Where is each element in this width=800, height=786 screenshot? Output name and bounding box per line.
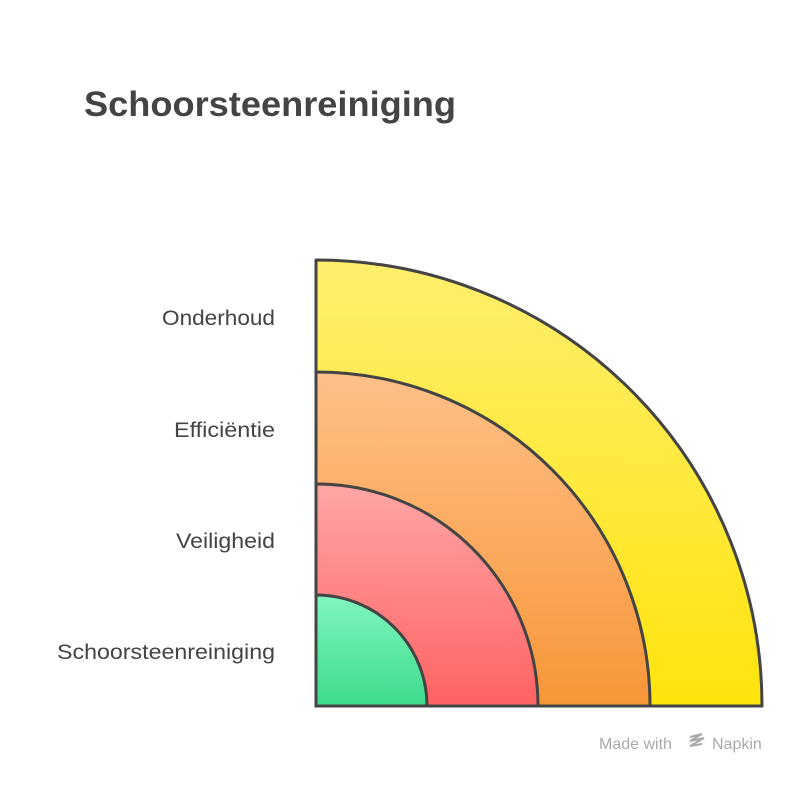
band: Veiligheid: [316, 484, 538, 706]
label: Schoorsteenreiniging: Schoorsteenreiniging: [57, 641, 275, 664]
footer: Made with Napkin: Made with: [599, 736, 672, 753]
footer: Made with Napkin: [599, 734, 762, 753]
label: Veiligheid: Veiligheid: [176, 530, 275, 553]
core: Schoorsteenreiniging: [316, 595, 427, 706]
band: Onderhoud: [316, 260, 762, 706]
label: Efficiëntie: Efficiëntie: [174, 419, 275, 442]
band: Efficiëntie: [316, 372, 650, 706]
footer: Made with Napkin: Napkin: [712, 736, 762, 753]
labels: [57, 307, 275, 664]
label: Onderhoud: Onderhoud: [162, 307, 275, 330]
title: Schoorsteenreiniging: [84, 85, 456, 124]
